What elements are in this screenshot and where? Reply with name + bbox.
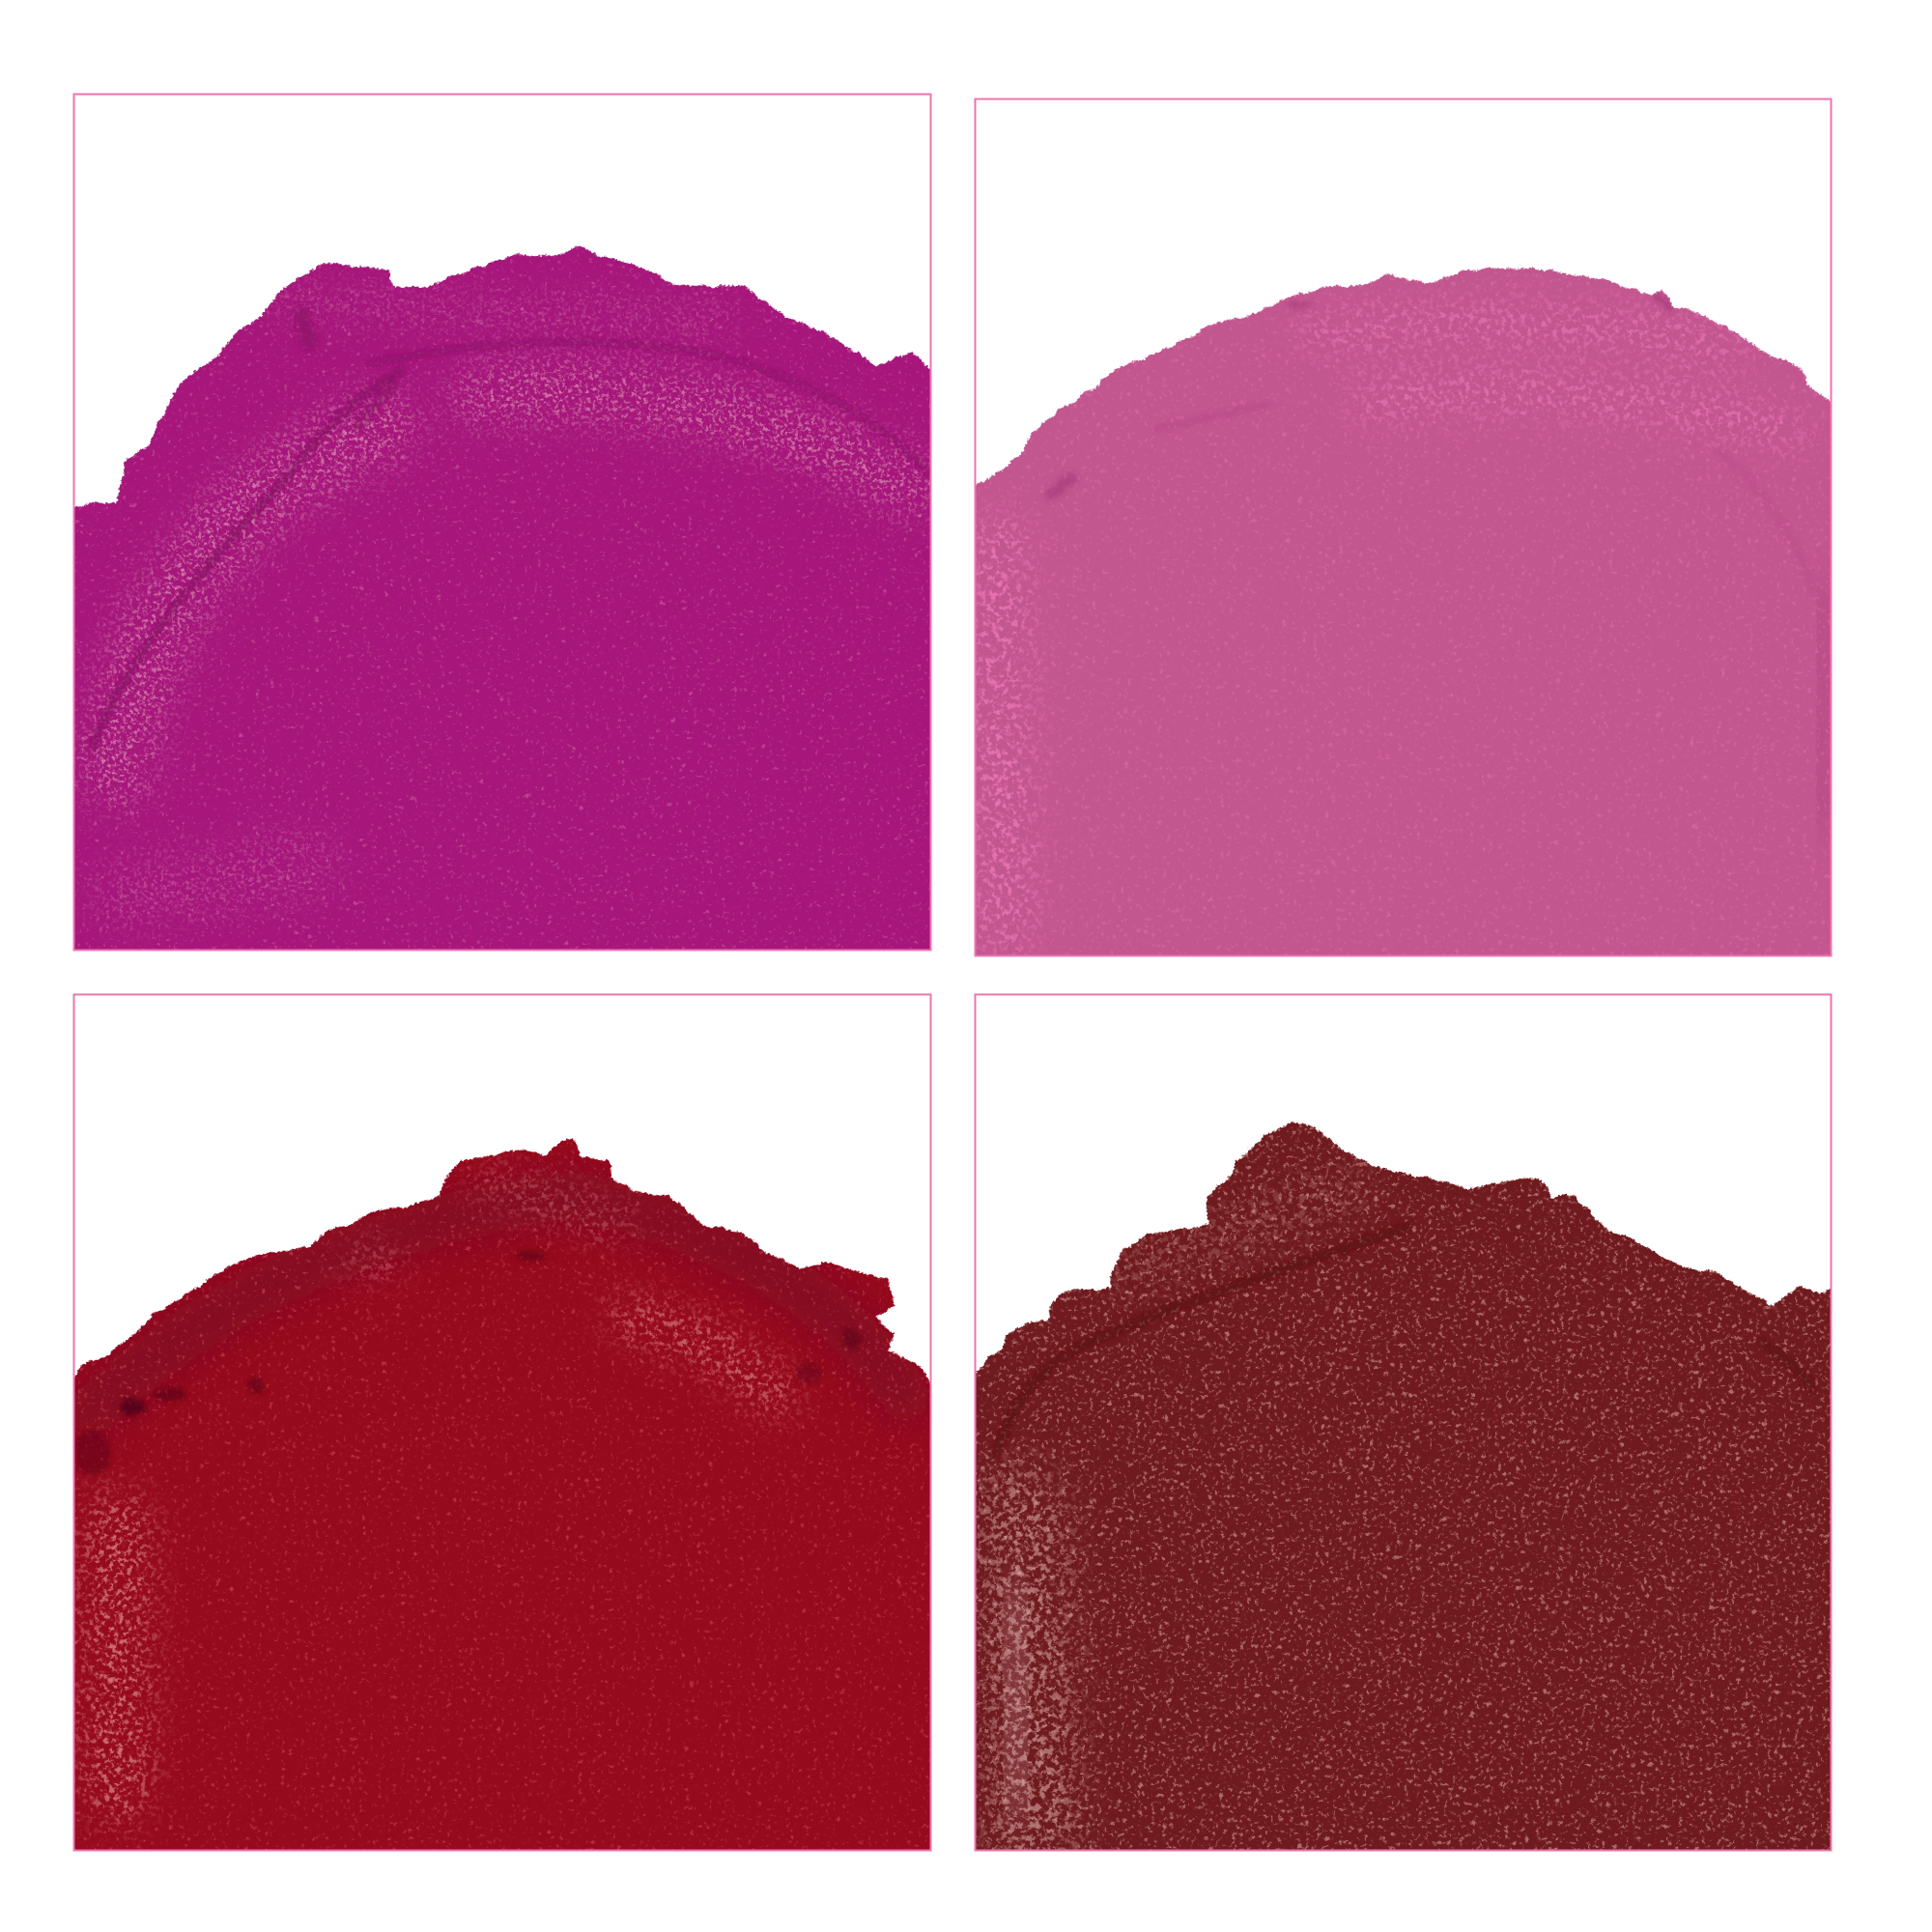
frame: magenta panel <box>73 95 931 951</box>
frame: red panel <box>73 995 931 1851</box>
frame: pink panel <box>976 99 1832 956</box>
panel: pink lipstick swatch <box>974 99 1832 956</box>
panel: red lipstick swatch <box>73 993 931 1851</box>
frame: brown-red panel <box>976 995 1832 1851</box>
panel: magenta lipstick swatch <box>73 93 931 951</box>
panel: brown-red lipstick swatch <box>974 993 1832 1851</box>
